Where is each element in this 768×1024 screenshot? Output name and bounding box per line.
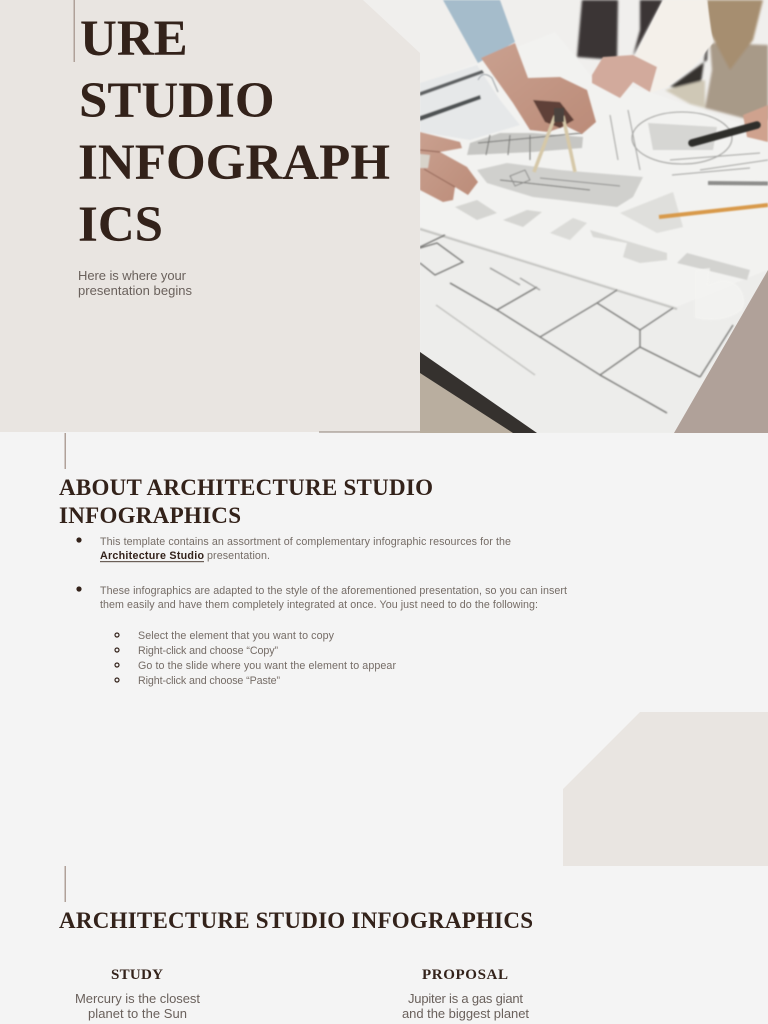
subtitle: Here is where your (78, 268, 187, 283)
column: proposal: and the biggest planet (402, 1006, 529, 1021)
text block: steps list (115, 630, 396, 687)
accent line: title (74, 0, 75, 62)
text block: main bullet list: These infographics are adapted to the style of the aforementioned presentation, so you can insert (100, 585, 567, 597)
column: study: Mercury is the closest (75, 991, 200, 1006)
column: proposal (402, 967, 529, 1021)
column: proposal: PROPOSAL (422, 967, 508, 983)
text block: steps list: Go to the slide where you want the element to appear (138, 660, 396, 672)
heading: about: INFOGRAPHICS (59, 503, 241, 528)
heading: about: ABOUT ARCHITECTURE STUDIO (59, 475, 433, 500)
lower plan walls (420, 235, 733, 413)
photo: architects working on blueprints (420, 0, 768, 433)
upper blueprint sheet (576, 57, 577, 58)
heading: about (59, 475, 433, 528)
translucent protractor (702, 268, 710, 271)
text block: steps list: Right-click and choose “Copy” (138, 645, 278, 657)
text block: steps list: Select the element that you want to copy (138, 630, 335, 642)
background: dark furniture and floor (577, 0, 618, 60)
column: study: planet to the Sun (88, 1006, 187, 1021)
subtitle: presentation begins (78, 283, 192, 298)
title (78, 11, 390, 253)
column: proposal: Jupiter is a gas giant (408, 991, 523, 1006)
text block: main bullet list: presentation. (207, 550, 270, 562)
lower blueprint sheet (420, 227, 768, 433)
woman's sleeve and hand (592, 0, 768, 142)
man's left hand (420, 132, 478, 202)
compass, pen and pencils (534, 108, 768, 217)
title: STUDIO (79, 73, 275, 129)
drawn plan shaded zones (455, 110, 768, 280)
text block: main bullet list: Architecture Studio (100, 550, 204, 562)
panel: title background (0, 0, 420, 432)
brown corner triangle (674, 270, 768, 433)
decorative cut-corner panel (563, 712, 768, 866)
heading: architecture studio infographics: ARCHITECTURE STUDIO INFOGRAPHICS (59, 908, 533, 933)
title: ICS (78, 197, 163, 253)
text block: main bullet list (76, 536, 567, 611)
subtitle (78, 268, 192, 298)
accent line: about section (64, 433, 66, 469)
column: study: STUDY (111, 967, 163, 983)
title: INFOGRAPH (78, 135, 390, 191)
man's denim sleeve and arm (443, 0, 596, 134)
decorative thin line (319, 432, 420, 433)
accent line: infographics section (64, 866, 66, 902)
text block: main bullet list: This template contains an assortment of complementary infographic resources for the (100, 536, 511, 548)
text block: steps list: Right-click and choose “Paste” (138, 675, 280, 687)
title: URE (80, 11, 188, 67)
text block: main bullet list: them easily and have them completely integrated at once. You just need to do the following: (100, 599, 538, 611)
booklet on the blueprint (420, 65, 520, 140)
table edge and floor (420, 352, 513, 433)
column: study (75, 967, 200, 1021)
